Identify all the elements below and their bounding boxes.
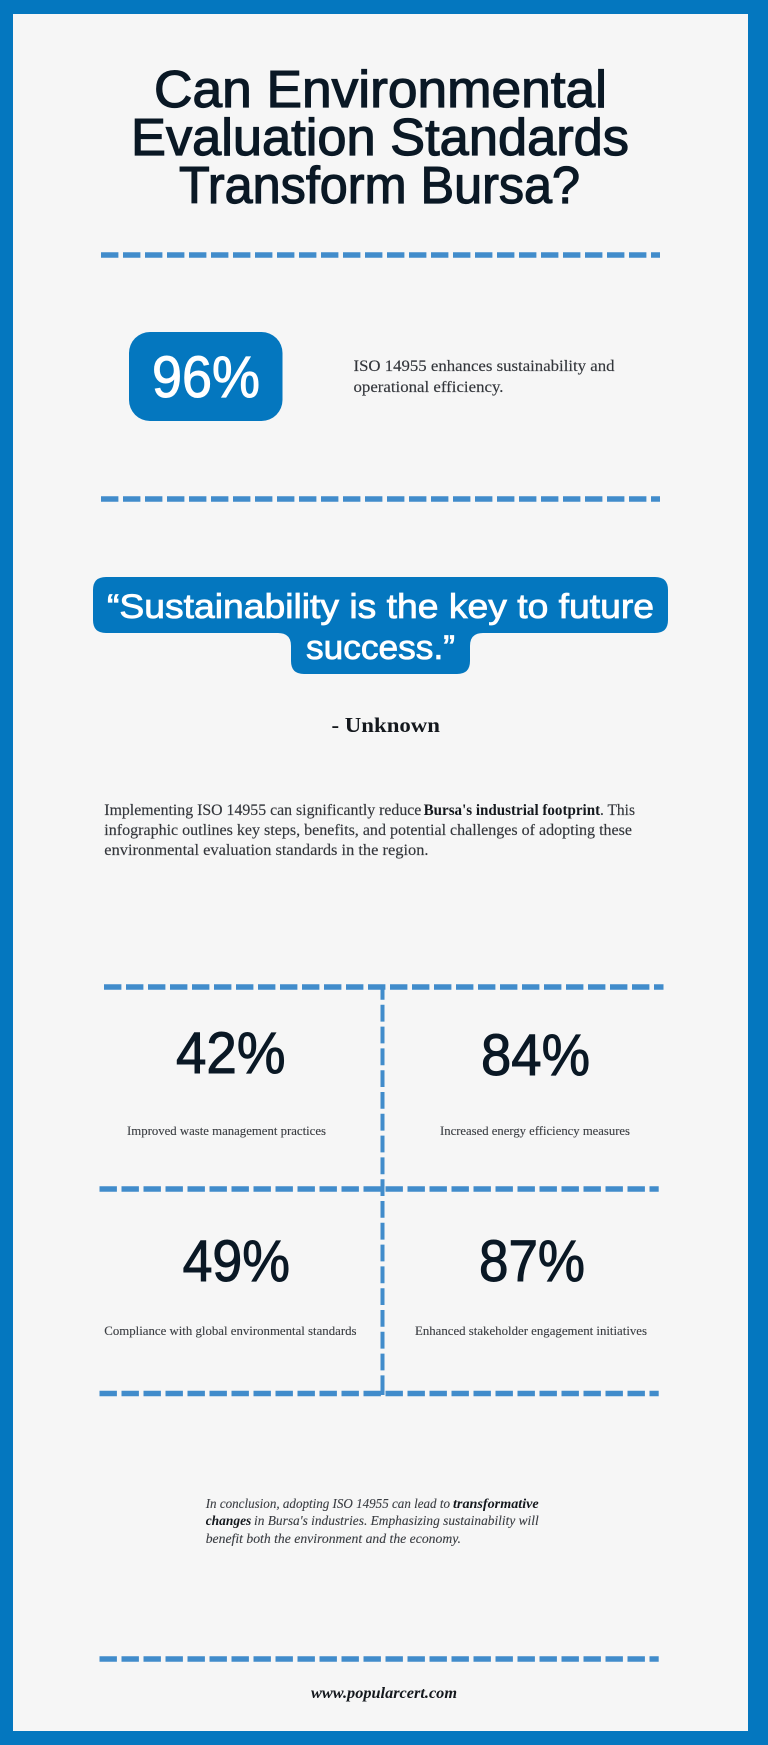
- quote banner: [93, 577, 668, 674]
- conclusion paragraph: changes: [206, 1514, 252, 1529]
- stat description: [354, 358, 614, 396]
- stat callout: 96%: 96%: [152, 345, 260, 410]
- conclusion paragraph: [205, 1497, 539, 1547]
- conclusion paragraph: transformative: [453, 1497, 539, 1512]
- title: Evaluation Standards: [131, 109, 629, 167]
- intro paragraph: environmental evaluation standards in the region.: [104, 842, 429, 859]
- title: [131, 61, 629, 215]
- stat description: operational efficiency.: [354, 379, 504, 396]
- conclusion paragraph: In conclusion, adopting ISO 14955 can lead to: [205, 1497, 450, 1512]
- stat: 87%: [415, 1229, 647, 1338]
- stat: 49%: 49%: [183, 1229, 290, 1294]
- conclusion paragraph: benefit both the environment and the economy.: [206, 1532, 461, 1547]
- quote banner: “Sustainability is the key to future: [107, 588, 654, 626]
- title: Can Environmental: [154, 61, 607, 119]
- stat: 87%: Enhanced stakeholder engagement initiatives: [415, 1323, 647, 1338]
- title: Transform Bursa?: [179, 157, 580, 215]
- stat: 42%: Improved waste management practices: [127, 1123, 326, 1138]
- intro paragraph: . This: [600, 802, 635, 819]
- intro paragraph: Implementing ISO 14955 can significantly reduce: [104, 802, 421, 819]
- quote attribution: - Unknown: [332, 713, 440, 737]
- stat: 42%: 42%: [176, 1021, 286, 1086]
- stat description: ISO 14955 enhances sustainability and: [354, 358, 614, 375]
- conclusion paragraph: in Bursa's industries. Emphasizing sustainability will: [254, 1514, 539, 1529]
- intro paragraph: [104, 802, 635, 859]
- stat: 87%: 87%: [479, 1229, 585, 1294]
- stat: 42%: [127, 1021, 326, 1138]
- stat: 49%: [104, 1229, 356, 1338]
- stat: 84%: 84%: [481, 1023, 590, 1088]
- website url: www.popularcert.com: [311, 1685, 457, 1702]
- stat: 84%: [440, 1023, 630, 1138]
- intro paragraph: Bursa's industrial footprint: [424, 802, 601, 819]
- stat: 49%: Compliance with global environmental standards: [104, 1323, 356, 1338]
- intro paragraph: infographic outlines key steps, benefits, and potential challenges of adopting these: [104, 822, 632, 839]
- quote banner: success.”: [306, 629, 455, 667]
- stat: 84%: Increased energy efficiency measures: [440, 1123, 630, 1138]
- stat callout: 96%: [129, 332, 282, 421]
